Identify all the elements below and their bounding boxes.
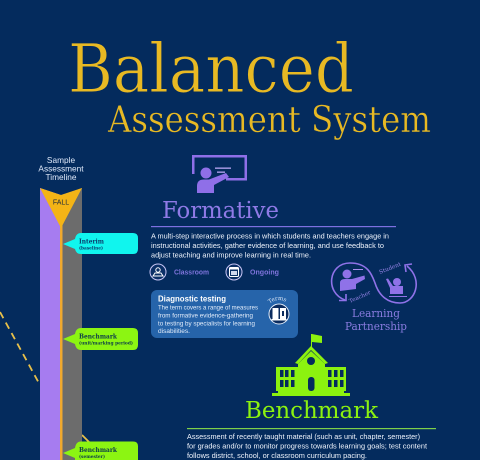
title	[68, 30, 431, 141]
icon: partnership loop: Student	[379, 261, 403, 276]
icon: school	[272, 334, 350, 396]
timeline heading: Sample	[47, 155, 75, 165]
icon: calendar	[226, 264, 242, 280]
timeline gray column	[61, 188, 82, 460]
formative description: instructional activities, gather evidence of learning, and use feedback to	[151, 241, 384, 250]
icon: teacher at board	[192, 155, 247, 193]
callout: benchmark semester: (semester)	[79, 453, 105, 460]
callout: benchmark unit	[63, 328, 138, 350]
benchmark description: Assessment of recently taught material (such as unit, chapter, semester)	[187, 432, 420, 441]
timeline heading: Timeline	[45, 172, 77, 182]
panel: diagnostic testing: disabilities.	[158, 328, 190, 335]
timeline purple column	[40, 188, 61, 460]
benchmark description: follows district, school, or classroom curriculum pacing.	[187, 451, 367, 460]
icon: terms book	[268, 297, 290, 324]
rule	[151, 226, 396, 227]
callout: interim: (baseline)	[79, 244, 103, 252]
icon: partnership loop	[332, 261, 416, 305]
title line: Assessment System: Assessment System	[107, 100, 431, 141]
benchmark description: for grades and/or to monitor progress towards learning goals; test content	[187, 442, 427, 450]
dashed path: left	[0, 312, 40, 385]
panel: diagnostic testing: to testing by specialists for learning	[158, 320, 255, 328]
panel: formative	[150, 155, 396, 338]
panel: diagnostic testing: Diagnostic testing	[158, 294, 226, 304]
heading: learning partnership	[345, 306, 407, 333]
heading: Benchmark: Benchmark	[245, 398, 379, 424]
icon: terms book: Terms	[268, 297, 286, 303]
title line: Balanced: Balanced	[68, 30, 354, 108]
callout: benchmark semester	[63, 442, 138, 460]
icon: partnership loop: Teacher	[348, 290, 372, 305]
panel: learning partnership	[332, 261, 416, 333]
panel: diagnostic testing: from formative evidence-gathering	[158, 312, 253, 320]
callout: interim: Interim	[79, 238, 105, 246]
callout: benchmark semester: Benchmark	[79, 447, 118, 454]
benchmark description	[187, 432, 427, 460]
formative description: A multi-step interactive process in which students and teachers engage in	[151, 232, 389, 240]
fall marker: FALL	[53, 200, 69, 206]
formative description	[151, 232, 389, 260]
dashed path: right	[82, 435, 90, 443]
label: ongoing: Ongoing	[250, 270, 279, 276]
heading: learning partnership: Partnership	[345, 319, 407, 333]
formative description: adjust teaching and improve learning in real time.	[151, 250, 311, 260]
panel: benchmark	[187, 334, 436, 460]
heading: Formative: Formative	[162, 198, 279, 224]
panel: diagnostic testing	[151, 290, 298, 338]
timeline center line	[60, 220, 62, 460]
callout: benchmark unit: Benchmark	[79, 334, 118, 340]
icon: classroom	[150, 264, 166, 280]
callout: benchmark unit: (unit/marking period)	[79, 340, 133, 346]
callout: interim	[63, 233, 138, 254]
timeline heading: Assessment	[38, 164, 84, 174]
fall marker	[40, 188, 82, 228]
heading: learning partnership: Learning	[352, 306, 401, 320]
panel: diagnostic testing: The term covers a range of measures	[158, 304, 258, 312]
timeline	[38, 155, 138, 460]
rule	[187, 428, 436, 429]
label: classroom: Classroom	[174, 270, 209, 276]
